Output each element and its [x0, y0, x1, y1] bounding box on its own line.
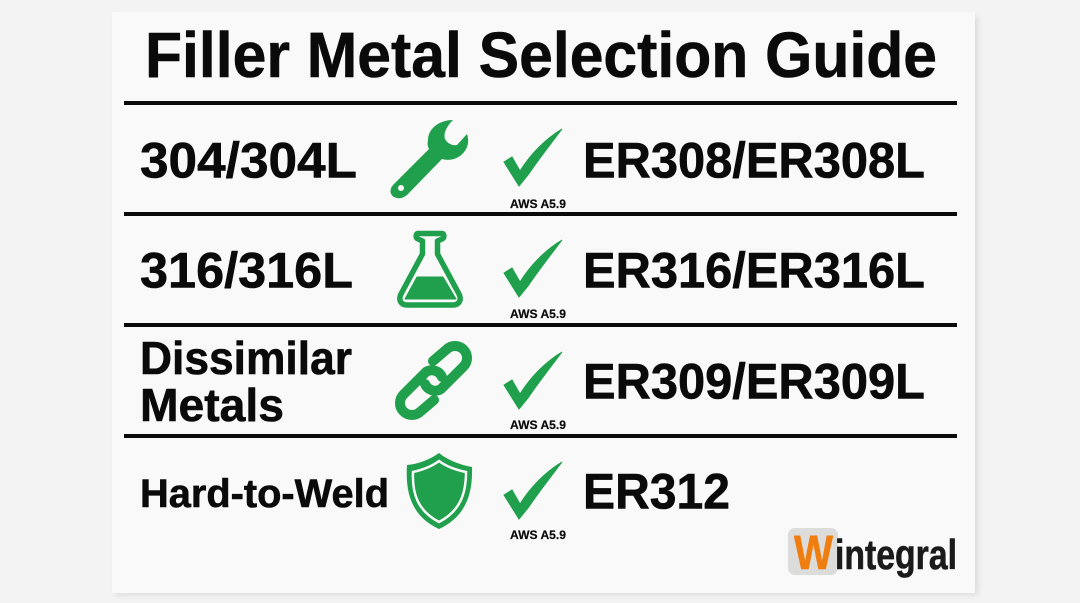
panel: card — [112, 12, 975, 593]
icon: flask — [400, 234, 460, 305]
logo tile — [788, 528, 838, 575]
row: 316/316L — [140, 234, 925, 321]
standard label: AWS A5.9 — [510, 528, 566, 542]
base metal label: Dissimilar — [140, 332, 352, 384]
icon: wrench — [390, 120, 468, 198]
base metal label — [140, 332, 352, 431]
icon: check — [504, 129, 562, 186]
icon: shield — [407, 453, 472, 529]
base metal label: 304/304L — [140, 132, 357, 188]
base metal label: Hard-to-Weld — [140, 472, 389, 516]
icon: check — [504, 352, 562, 409]
icon: chain link — [400, 346, 467, 415]
filler metal: ER312 — [583, 464, 730, 520]
standard label: AWS A5.9 — [510, 307, 566, 321]
base metal label: 316/316L — [140, 242, 353, 298]
panel: card shadow — [115, 16, 978, 595]
row: dissimilar metals — [140, 332, 925, 432]
filler metal: ER308/ER308L — [583, 132, 925, 188]
icon: check — [504, 240, 562, 297]
logo text: integral — [835, 531, 957, 578]
row dividers — [124, 101, 957, 438]
logo: Wintegral — [788, 527, 957, 580]
filler metal: ER309/ER309L — [583, 354, 925, 410]
row: 304/304L — [140, 120, 925, 211]
standard label: AWS A5.9 — [510, 197, 566, 211]
title: Filler Metal Selection Guide — [145, 19, 937, 91]
icon: check — [504, 462, 562, 519]
base metal label: Metals — [140, 379, 284, 431]
row: hard-to-weld — [140, 453, 730, 542]
logo W: W — [794, 527, 834, 580]
filler metal: ER316/ER316L — [583, 242, 925, 298]
standard label: AWS A5.9 — [510, 418, 566, 432]
